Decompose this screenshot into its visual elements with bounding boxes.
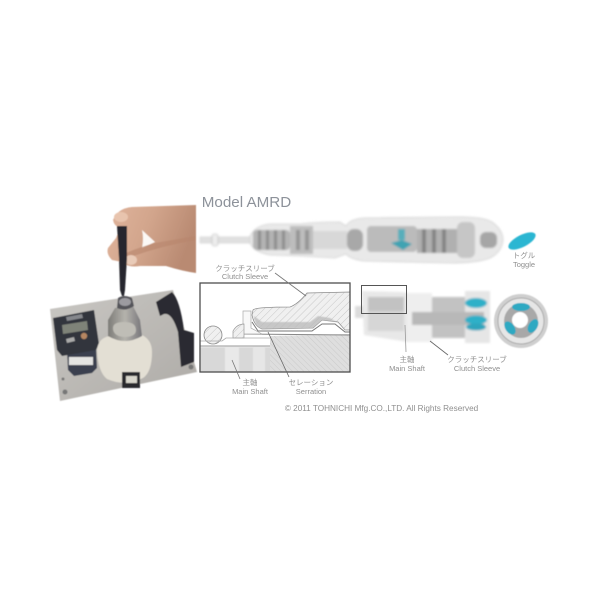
leader: serration (268, 332, 289, 377)
label: main shaft (right) (389, 354, 426, 373)
label: toggle: Toggle (513, 260, 535, 269)
tip collar (212, 234, 218, 246)
black handle bracket (156, 292, 194, 367)
serration dark line (252, 322, 350, 332)
bit shaft (200, 237, 250, 243)
digital tester unit (53, 310, 99, 376)
mounting screws (62, 364, 194, 394)
heading: Model AMRD: Model AMRD (202, 194, 291, 211)
label: serration: Serration (296, 387, 326, 396)
label: main shaft (right): 主軸 (400, 354, 414, 364)
diagram: clutch side view (355, 291, 490, 343)
label: toggle (513, 250, 536, 269)
teal toggle inside (391, 240, 412, 250)
callout label: clutch sleeve (detail) (215, 263, 275, 281)
screwdriver (117, 226, 127, 296)
label: main shaft (right): Main Shaft (389, 364, 426, 373)
shaft top line (200, 338, 270, 341)
teal toggles side view (465, 298, 487, 308)
diagram: transparent driver assembly (200, 217, 503, 263)
teal toggles end view (512, 303, 530, 311)
label: serration (289, 378, 333, 396)
bearing shaded area (254, 316, 345, 330)
shaft (355, 306, 365, 318)
label: clutch sleeve (right) (447, 354, 507, 373)
label: serration: セレーション (289, 378, 333, 387)
label: main shaft (detail): 主軸 (242, 377, 258, 387)
label: toggle: トグル (513, 250, 536, 260)
hand holding driver (108, 205, 196, 273)
leader: main shaft right (405, 325, 406, 352)
leader: clutch sleeve right (430, 341, 448, 355)
sleeve (407, 293, 432, 342)
thumb shadow (126, 236, 196, 258)
dark internal parts (253, 230, 290, 250)
label: main shaft (detail): Main Shaft (232, 387, 269, 396)
lower hatched body (270, 334, 350, 372)
ball (204, 326, 222, 344)
label: clutch sleeve (right): クラッチスリーブ (447, 354, 507, 364)
leader: clutch sleeve (275, 273, 306, 296)
callout label: clutch sleeve (detail): クラッチスリーブ (215, 263, 275, 273)
copyright: © 2011 TOHNICHI Mfg.CO.,LTD. All Rights Reserved (285, 404, 479, 413)
icon: toggle part (506, 229, 538, 253)
front body (362, 291, 407, 342)
clutch sleeve section (252, 292, 350, 330)
label: main shaft (detail) (232, 377, 269, 396)
steel base plate (50, 290, 197, 401)
photo: torque tester with hand and screwdriver (50, 205, 197, 401)
frame (200, 283, 350, 372)
outer transparent housing (250, 217, 503, 263)
inset rectangle (362, 286, 406, 314)
callout label: clutch sleeve (detail): Clutch Sleeve (222, 272, 268, 281)
label: clutch sleeve (right): Clutch Sleeve (454, 364, 500, 373)
leader: main shaft (232, 360, 240, 379)
white gap between thumb and finger (142, 230, 155, 248)
diagram: clutch end view (494, 294, 548, 348)
panel: enlarged cross section (200, 283, 350, 372)
main shaft body (200, 347, 278, 372)
white clutch socket (97, 296, 152, 388)
fingernail highlight (125, 255, 137, 265)
collar piece (243, 311, 262, 334)
